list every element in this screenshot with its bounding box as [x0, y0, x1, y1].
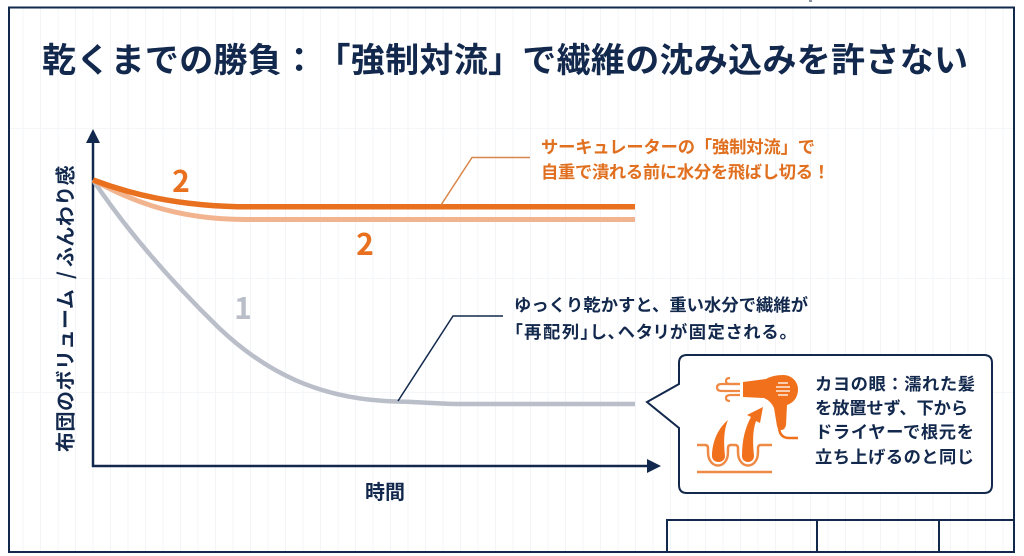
icon: skin and follicles	[697, 445, 772, 472]
icon: hair dryer over hair follicles	[697, 375, 798, 472]
y axis	[86, 129, 100, 467]
y axis label: ふんわり感	[54, 165, 78, 267]
callout box	[647, 355, 992, 493]
curve label 2 lower: 2	[356, 220, 374, 264]
callout text	[815, 374, 975, 467]
callout text: カヨの眼：濡れた髪	[815, 374, 975, 394]
curve 1: slow drying	[93, 180, 635, 404]
icon: hair strands	[712, 407, 763, 462]
dark leader line	[398, 316, 503, 401]
dark annotation	[514, 295, 808, 342]
orange annotation: サーキュレーターの「強制対流」で	[541, 137, 815, 157]
y axis label: /	[50, 271, 78, 279]
curve label 2 upper: 2	[172, 157, 190, 201]
x axis label: 時間	[365, 481, 405, 504]
dark annotation: ゆっくり乾かすと、重い水分で繊維が	[514, 295, 808, 315]
curve 2: light orange	[93, 180, 635, 220]
callout text: を放置せず、下から	[815, 398, 968, 418]
dark annotation: 「再配列」し、ヘタリが固定される。	[514, 322, 788, 342]
icon: wind	[717, 378, 740, 401]
callout text: 立ち上げるのと同じ	[815, 447, 974, 467]
icon: dryer	[743, 375, 798, 438]
y axis label: 布団のボリューム	[54, 289, 78, 452]
curve 2: forced convection	[93, 180, 635, 207]
orange leader line	[441, 158, 530, 205]
curve label 1: 1	[234, 284, 252, 328]
title: 乾くまでの勝負：「強制対流」で繊維の沈み込みを許さない	[42, 42, 968, 80]
orange annotation	[541, 137, 830, 182]
title block table	[667, 520, 1014, 552]
y axis label	[50, 165, 78, 452]
orange annotation: 自重で潰れる前に水分を飛ばし切る！	[541, 162, 830, 182]
x axis	[92, 459, 661, 473]
callout text: ドライヤーで根元を	[815, 422, 974, 442]
